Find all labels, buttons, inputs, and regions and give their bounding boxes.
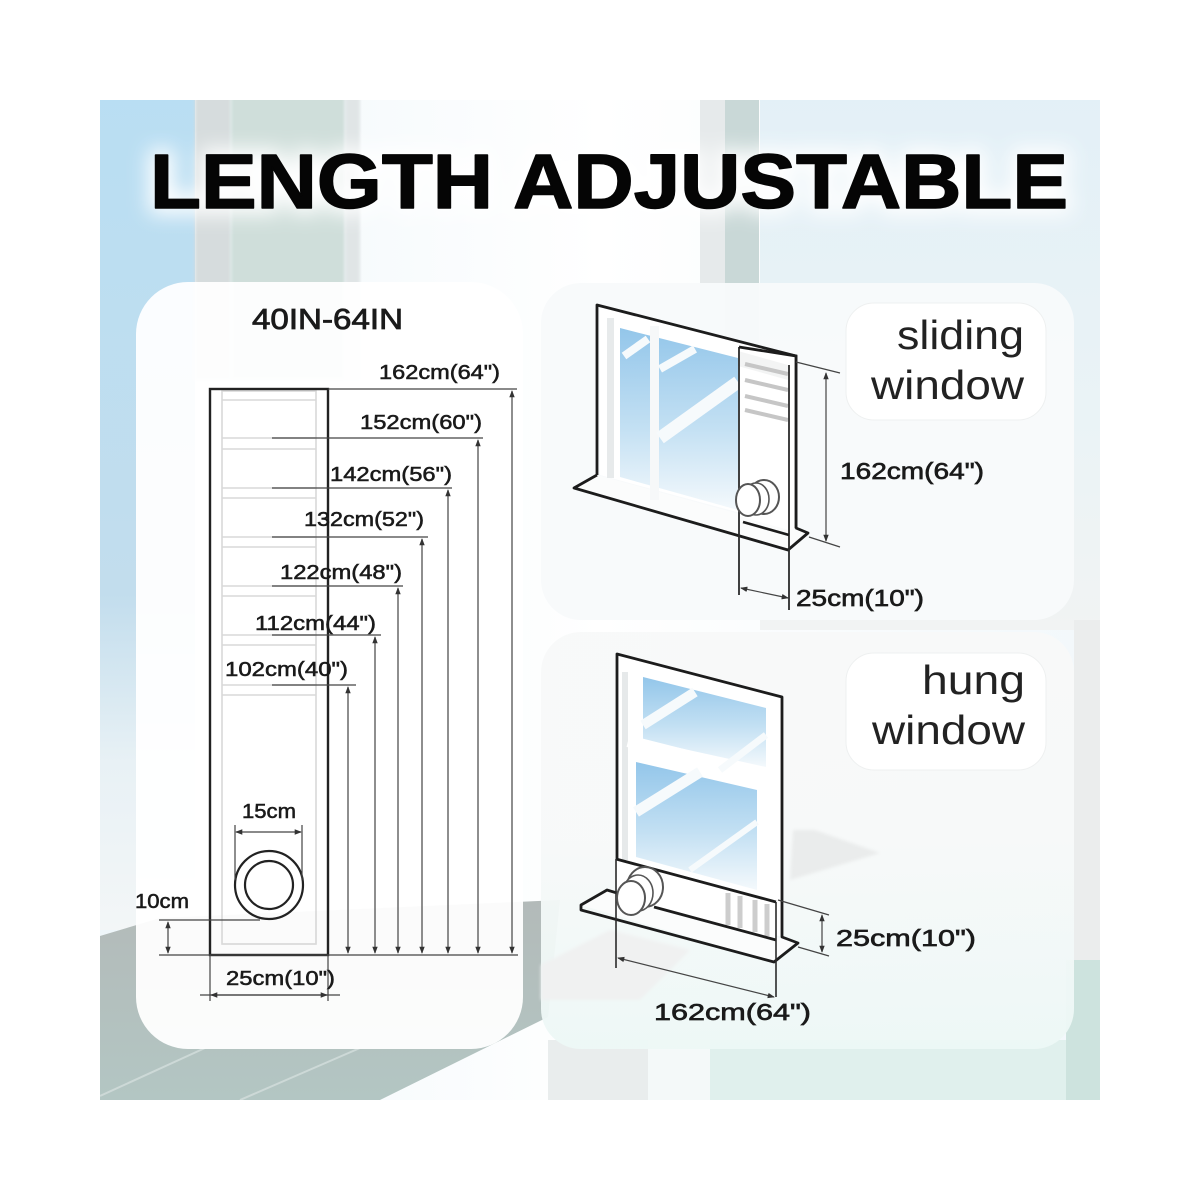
hose port (617, 867, 663, 915)
15cm dimension: 15cm (242, 800, 296, 823)
label chip: sliding window: window (870, 362, 1024, 408)
hose port (736, 480, 779, 516)
label chip: hung window: hung (922, 657, 1025, 703)
label chip: hung window: window (871, 707, 1025, 753)
15cm dimension (235, 800, 302, 880)
25cm width dimension: 25cm(10") (226, 967, 335, 990)
height labels: 162cm(64") (379, 361, 500, 384)
height labels: 152cm(60") (360, 411, 482, 434)
heading: length range: 40IN-64IN (252, 304, 403, 336)
panel: length diagram (135, 282, 523, 1049)
sliding window drawing (574, 305, 808, 610)
height dimension lines (159, 389, 518, 955)
adjustable panel drawing (210, 389, 328, 955)
dimension: hung width (618, 958, 811, 1025)
dimension: hung width: 162cm(64") (654, 999, 811, 1025)
hung window drawing (581, 654, 798, 997)
background photo: window and curtain (90, 80, 1110, 1100)
title: LENGTH ADJUSTABLE (150, 139, 1068, 225)
height labels: 132cm(52") (304, 508, 424, 531)
dimension: sliding width: 25cm(10") (796, 585, 924, 611)
height labels: 142cm(56") (330, 463, 452, 486)
panel: hung window (541, 632, 1074, 1049)
dimension: sliding width (741, 585, 924, 611)
lower window panel (616, 859, 776, 997)
window panel with vents (738, 347, 796, 610)
height labels: 102cm(40") (225, 658, 348, 681)
height labels: 122cm(48") (280, 561, 402, 584)
label chip: sliding window (846, 303, 1046, 420)
label chip: sliding window: sliding (897, 312, 1024, 358)
dimension: sliding height (796, 362, 984, 547)
floor shadows (790, 830, 880, 880)
height labels (225, 361, 500, 681)
height labels: 112cm(44") (255, 612, 376, 635)
dimension: hung height (778, 900, 976, 956)
label chip: hung window (846, 653, 1046, 770)
dimension: sliding height: 162cm(64") (840, 458, 984, 484)
dimension: hung height: 25cm(10") (836, 925, 976, 951)
panel: sliding window (541, 283, 1074, 620)
10cm dimension: 10cm (135, 890, 189, 913)
title: LENGTH ADJUSTABLE (150, 139, 1068, 225)
hose port circle (235, 851, 303, 919)
10cm dimension (135, 890, 260, 953)
25cm width dimension (200, 955, 340, 1001)
